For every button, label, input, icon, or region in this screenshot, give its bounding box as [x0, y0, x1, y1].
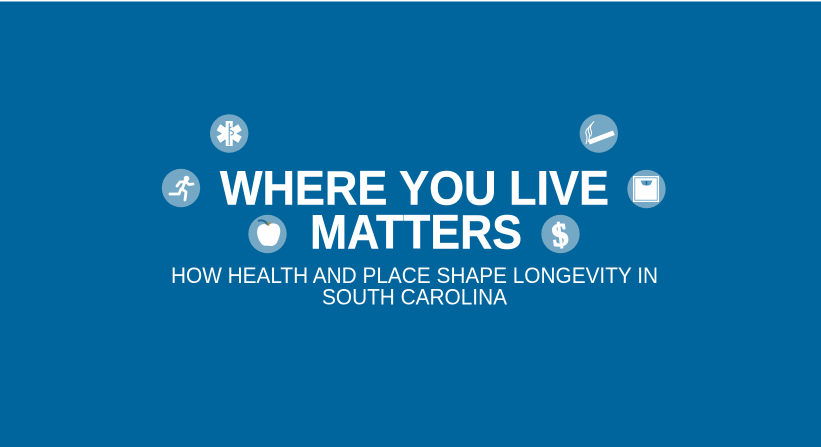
icon: running figure: [162, 169, 200, 207]
subtitle: SOUTH CAROLINA: [322, 284, 507, 310]
title: MATTERS: [310, 206, 522, 260]
title: WHERE YOU LIVE: [220, 162, 609, 216]
icon: bathroom scale: [627, 170, 666, 208]
subtitle: HOW HEALTH AND PLACE SHAPE LONGEVITY IN: [171, 263, 658, 288]
icon: dollar sign: [541, 215, 580, 253]
icon: cigarette with smoke: [580, 114, 618, 153]
title: [220, 162, 609, 260]
subtitle: [171, 263, 658, 310]
icon: apple: [248, 215, 287, 253]
icon: medical star of life: [210, 114, 248, 153]
icon: dollar sign: $: [550, 216, 570, 253]
